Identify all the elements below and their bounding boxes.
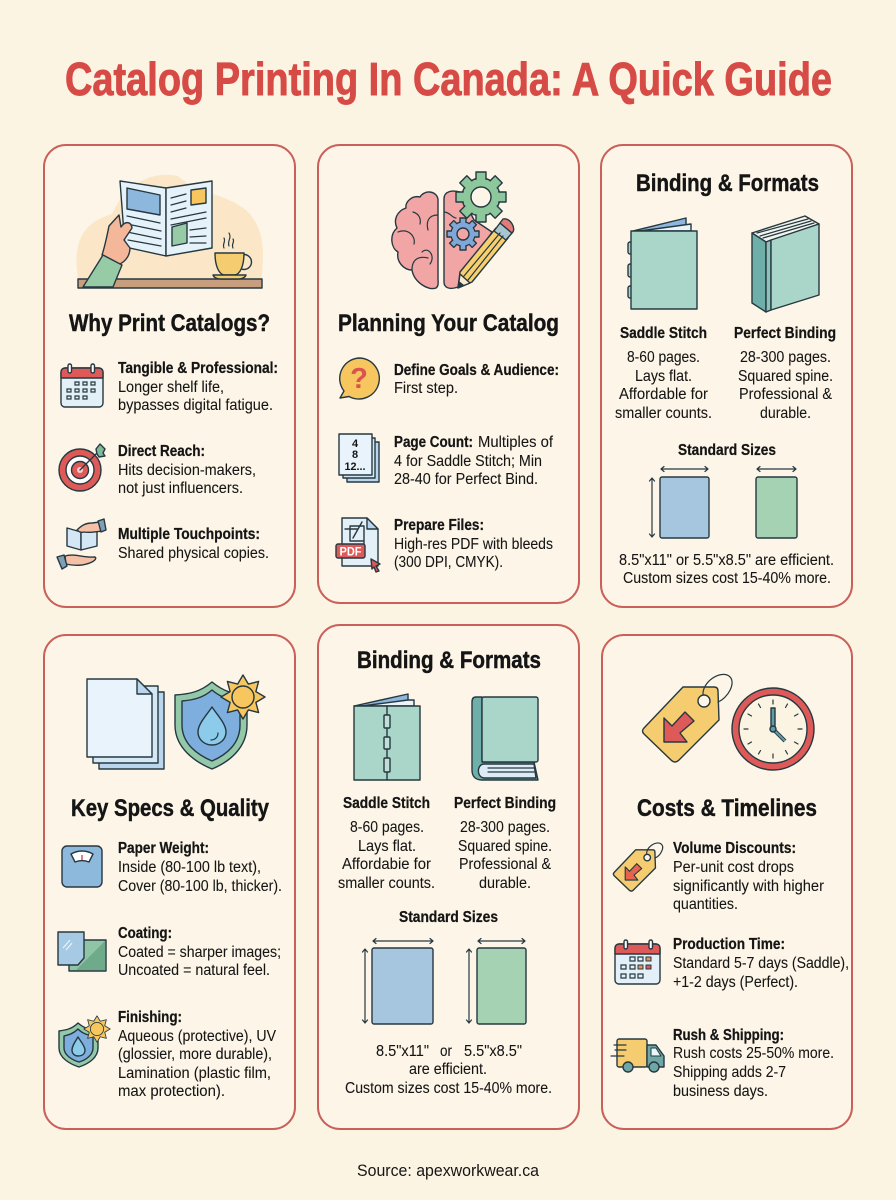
item: direct reach: not just influencers.	[118, 480, 243, 497]
heading: Planning Your Catalog	[338, 310, 559, 337]
heading: Why Print Catalogs?	[69, 310, 270, 337]
item: finishing: Finishing:	[118, 1009, 182, 1026]
text: perfect binding: Professional &	[459, 856, 551, 873]
illustration: paper stack and shield	[87, 675, 265, 769]
item: multiple touchpoints: Multiple Touchpoints:	[118, 526, 260, 543]
item: rush and shipping	[611, 1027, 834, 1100]
heading: Costs & Timelines	[637, 795, 817, 822]
icon: question bubble: ?	[350, 363, 368, 395]
item: production time: Standard 5-7 days (Saddle),	[673, 955, 849, 972]
item: production time: +1-2 days (Perfect).	[673, 974, 798, 991]
panel: costs and timelines	[602, 635, 852, 1129]
panel: planning your catalog	[318, 145, 579, 603]
item: tangible and professional: bypasses digital fatigue.	[118, 397, 273, 414]
icon: pencil	[458, 219, 514, 288]
item: tangible and professional: Longer shelf life,	[118, 379, 224, 396]
text: saddle stitch: Saddle Stitch	[343, 795, 430, 812]
text: size note	[345, 1043, 552, 1097]
icon: PDF file with crop mark	[336, 518, 380, 572]
item: prepare files	[336, 517, 553, 572]
source line: Source: apexworkwear.ca	[357, 1161, 540, 1180]
text: size note: or	[440, 1043, 453, 1060]
item: coating: Coating:	[118, 925, 172, 942]
panel: binding and formats (top)	[601, 145, 852, 607]
item: volume discounts: significantly with higher	[673, 878, 825, 895]
item: paper weight: Inside (80-100 lb text),	[118, 859, 261, 876]
item: page count: 4 for Saddle Stitch; Min	[394, 453, 542, 470]
item: define goals: Define Goals & Audience:	[394, 362, 559, 379]
heading: Key Specs & Quality	[71, 795, 270, 822]
item: prepare files: High-res PDF with bleeds	[394, 536, 553, 553]
icon: numbered pages: 4	[352, 438, 359, 450]
icon: numbered pages: 8	[352, 449, 358, 461]
text: perfect binding: Professional &	[739, 386, 832, 403]
icon: saddle stitch booklet	[628, 218, 697, 309]
item: coating	[58, 925, 281, 979]
item: rush and shipping: business days.	[673, 1083, 768, 1100]
text: saddle stitch: smaller counts.	[615, 405, 712, 422]
text: saddle stitch: 8-60 pages.	[627, 349, 700, 366]
icon: small price tag	[613, 843, 663, 891]
text: saddle stitch	[338, 795, 435, 892]
text: saddle stitch: Saddle Stitch	[620, 325, 707, 342]
text: perfect binding: durable.	[479, 875, 531, 892]
item: coating: Coated = sharper images;	[118, 944, 281, 961]
icon: delivery truck	[611, 1039, 664, 1072]
icon: calendar	[61, 364, 103, 407]
item: finishing	[59, 1009, 276, 1100]
item: rush and shipping: Shipping adds 2-7	[673, 1064, 786, 1081]
item: page count: Multiples of	[478, 434, 554, 451]
text: size note: Custom sizes cost 15-40% more.	[623, 570, 831, 587]
text: perfect binding: Perfect Binding	[734, 325, 836, 342]
icon: perfect bound book	[472, 697, 538, 780]
icon: scale	[62, 846, 102, 887]
text: size note	[619, 552, 834, 587]
text: saddle stitch: Affordabie for	[342, 856, 432, 873]
item: define goals: First step.	[394, 380, 458, 397]
item: define goals	[340, 358, 559, 399]
heading: Binding & Formats	[357, 647, 541, 674]
item: prepare files: (300 DPI, CMYK).	[394, 554, 503, 571]
icon: calendar	[615, 940, 660, 984]
illustration: brain, gears and pencil	[392, 172, 514, 289]
icon: coated and uncoated sheets	[58, 932, 106, 971]
icon: numbered pages	[339, 434, 379, 482]
item: page count: Page Count:	[394, 434, 473, 451]
diagram: size comparison	[362, 938, 526, 1024]
item: finishing: (glossier, more durable),	[118, 1046, 272, 1063]
illustration: reading a catalog with coffee	[76, 175, 263, 288]
text: size note: 8.5"x11" or 5.5"x8.5" are efficient.	[619, 552, 834, 569]
illustration: price tag and clock	[642, 674, 814, 770]
item: page count	[339, 434, 554, 488]
item: rush and shipping: Rush costs 25-50% more.	[673, 1045, 834, 1062]
item: tangible and professional	[61, 360, 278, 414]
diagram: size comparison	[650, 466, 797, 538]
text: saddle stitch: smaller counts.	[338, 875, 435, 892]
icon: blue gear	[447, 218, 479, 250]
text: perfect binding: Squared spine.	[738, 368, 833, 385]
icon: numbered pages: 12...	[344, 461, 366, 473]
subheading: standard sizes: Standard Sizes	[678, 442, 776, 459]
text: perfect binding	[454, 795, 556, 892]
item: production time	[615, 936, 849, 991]
text: perfect binding: Perfect Binding	[454, 795, 556, 812]
text: size note: 8.5"x11"	[376, 1043, 429, 1060]
text: saddle stitch	[615, 325, 712, 422]
item: volume discounts	[613, 840, 825, 913]
text: perfect binding: Squared spine.	[458, 838, 552, 855]
text: perfect binding: 28-300 pages.	[740, 349, 831, 366]
text: size note: 5.5"x8.5"	[464, 1043, 522, 1060]
subheading: standard sizes: Standard Sizes	[399, 909, 498, 926]
item: volume discounts: Volume Discounts:	[673, 840, 796, 857]
item: paper weight: Cover (80-100 lb, thicker).	[118, 878, 282, 895]
text: size note: are efficient.	[409, 1061, 487, 1078]
text: perfect binding: 28-300 pages.	[460, 819, 550, 836]
item: volume discounts: quantities.	[673, 896, 738, 913]
item: finishing: Aqueous (protective), UV	[118, 1028, 276, 1045]
item: finishing: max protection).	[118, 1083, 225, 1100]
item: direct reach: Hits decision-makers,	[118, 462, 256, 479]
heading: Binding & Formats	[636, 170, 819, 197]
panel: key specs and quality	[44, 635, 295, 1129]
item: tangible and professional: Tangible & Professional:	[118, 360, 278, 377]
text: perfect binding	[734, 325, 836, 422]
item: volume discounts: Per-unit cost drops	[673, 859, 794, 876]
text: perfect binding: durable.	[760, 405, 811, 422]
text: saddle stitch: 8-60 pages.	[350, 819, 424, 836]
icon: price tag	[642, 674, 732, 762]
text: size note: Custom sizes cost 15-40% more.	[345, 1080, 552, 1097]
icon: question bubble	[340, 358, 379, 399]
panel: binding and formats (bottom)	[318, 625, 579, 1129]
item: prepare files: Prepare Files:	[394, 517, 484, 534]
icon: shield with sun	[59, 1016, 110, 1067]
icon: perfect bound book	[752, 216, 819, 312]
item: paper weight: Paper Weight:	[118, 840, 209, 857]
item: production time: Production Time:	[673, 936, 785, 953]
item: coating: Uncoated = natural feel.	[118, 962, 270, 979]
item: direct reach: Direct Reach:	[118, 443, 205, 460]
icon: green gear	[456, 172, 506, 222]
item: paper weight	[62, 840, 282, 895]
item: rush and shipping: Rush & Shipping:	[673, 1027, 784, 1044]
icon: PDF file with crop mark: PDF	[340, 544, 362, 558]
icon: target with arrow	[59, 444, 105, 491]
panel: why print catalogs	[44, 145, 295, 607]
icon: hands sharing a book	[57, 519, 106, 569]
text: saddle stitch: Lays flat.	[358, 838, 416, 855]
item: finishing: Lamination (plastic film,	[118, 1065, 271, 1082]
icon: saddle stitch booklet with staples	[354, 694, 420, 780]
item: multiple touchpoints	[57, 519, 269, 569]
text: saddle stitch: Lays flat.	[635, 368, 692, 385]
icon: clock	[732, 688, 814, 770]
text: saddle stitch: Affordable for	[619, 386, 709, 403]
item: direct reach	[59, 443, 256, 497]
item: page count: 28-40 for Perfect Bind.	[394, 471, 538, 488]
item: multiple touchpoints: Shared physical copies.	[118, 545, 269, 562]
